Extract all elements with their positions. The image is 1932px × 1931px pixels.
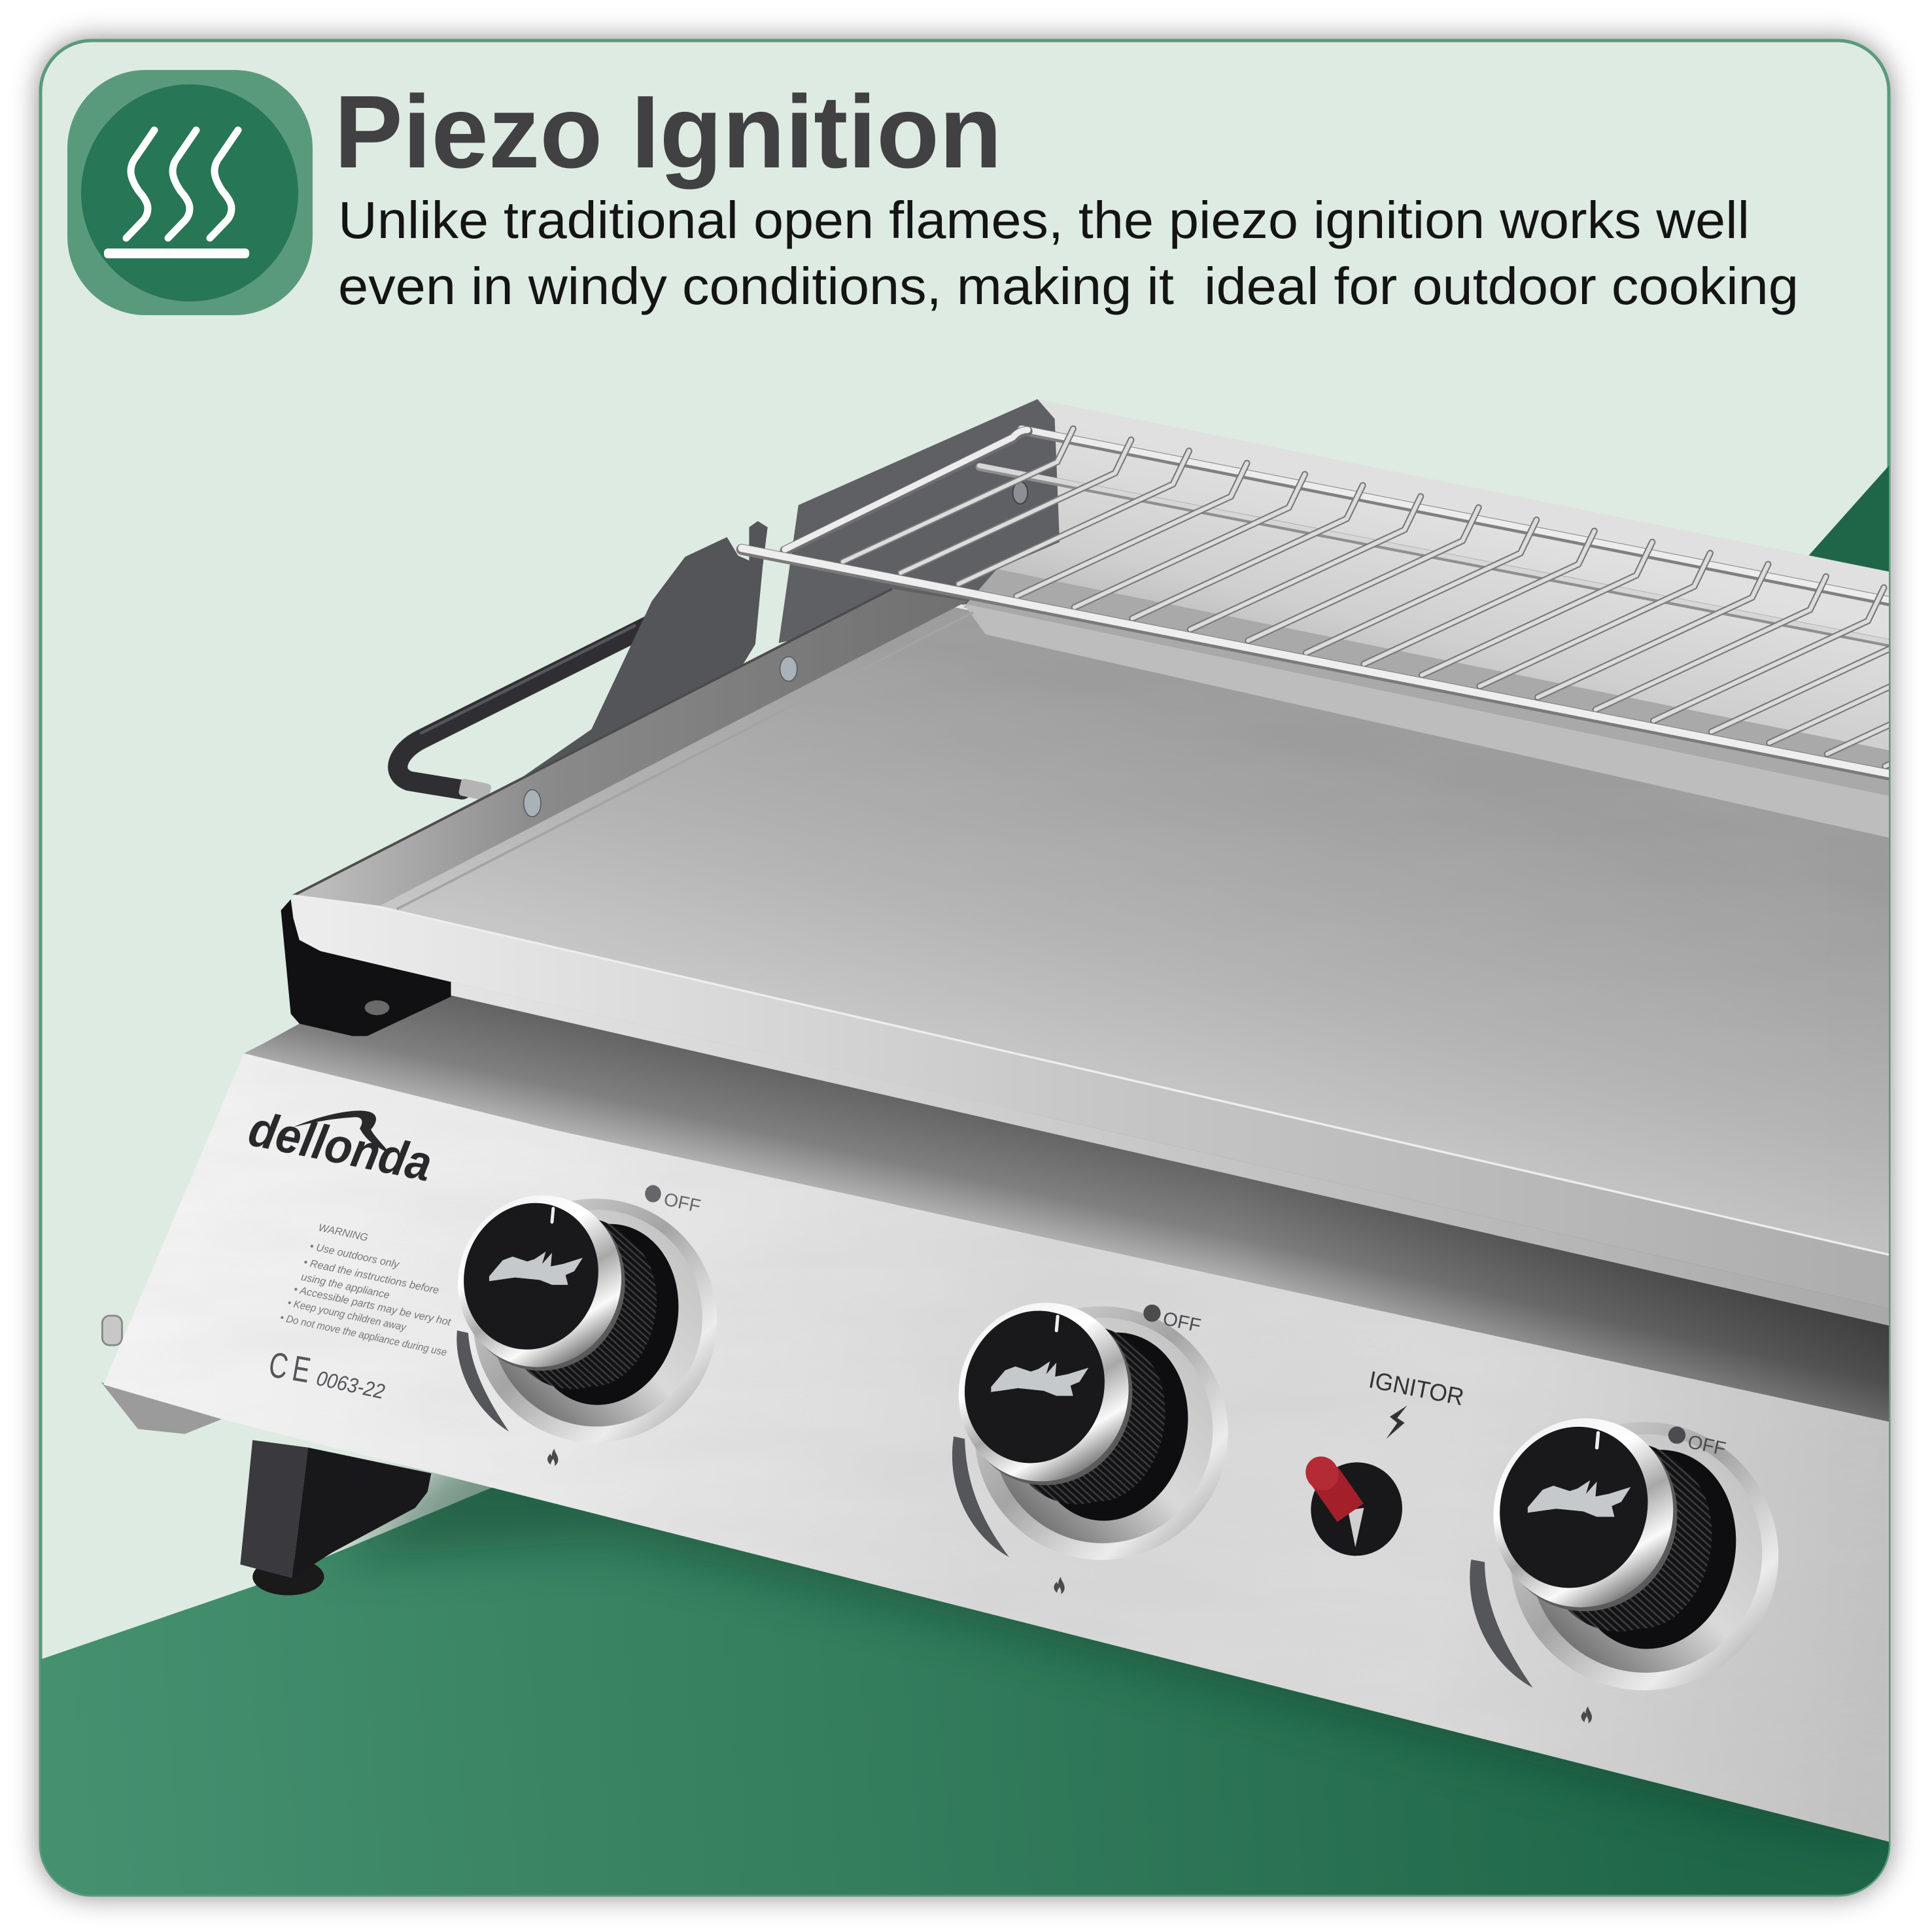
control knob 1 bbox=[438, 1176, 717, 1443]
rear side plate bbox=[779, 399, 1060, 643]
control knob 2 bbox=[938, 1282, 1228, 1560]
cast shadow on green bbox=[326, 1462, 1875, 1843]
griddle back wall bbox=[963, 604, 1889, 838]
certification mark: C bbox=[266, 1344, 291, 1387]
rack front rod bbox=[742, 548, 1889, 775]
certification mark bbox=[266, 1344, 387, 1403]
rack wires bbox=[843, 429, 1932, 766]
rack side frame bbox=[785, 430, 1027, 551]
off label 3: OFF bbox=[1686, 1431, 1727, 1460]
dial arc 1 bbox=[457, 1331, 509, 1431]
off label 1 bbox=[645, 1185, 702, 1216]
griddle surface bbox=[378, 607, 1889, 1255]
warning label: • Accessible parts may be very hot bbox=[293, 1284, 452, 1328]
wire rack bbox=[742, 429, 1932, 775]
light strip under griddle bbox=[451, 982, 1889, 1325]
off label 3 bbox=[1668, 1427, 1727, 1460]
ignitor button bbox=[1299, 1450, 1412, 1565]
description bbox=[338, 191, 1799, 315]
warning label: • Read the instructions before bbox=[303, 1257, 440, 1297]
left side fittings bbox=[101, 1316, 222, 1434]
ignitor label: IGNITOR bbox=[1367, 1366, 1466, 1410]
rack backing sheet bbox=[997, 399, 1889, 754]
flame mark 2 bbox=[1054, 1577, 1065, 1594]
dial arc 3 bbox=[1470, 1560, 1533, 1688]
off label 2: OFF bbox=[1161, 1308, 1203, 1337]
front bracket bbox=[281, 899, 451, 1036]
left rear bracket bbox=[524, 521, 768, 776]
griddle left rail bbox=[293, 589, 973, 909]
brand logo: dellonda bbox=[245, 1101, 436, 1191]
control knob 3 bbox=[1471, 1397, 1778, 1690]
warning label: WARNING bbox=[317, 1222, 369, 1244]
dial arc 2 bbox=[952, 1437, 1009, 1557]
griddle bolts bbox=[524, 482, 1027, 817]
description: even in windy conditions, making it ideal for outdoor cooking bbox=[338, 257, 1799, 315]
title: Piezo Ignition bbox=[334, 75, 1002, 190]
flame mark 1 bbox=[547, 1448, 558, 1466]
griddle front lip bbox=[293, 896, 1889, 1308]
description: Unlike traditional open flames, the piezo ignition works well bbox=[338, 191, 1750, 249]
certification mark: E bbox=[290, 1348, 313, 1390]
control panel face bbox=[103, 1053, 1889, 1841]
griddle rear band bbox=[963, 569, 1889, 803]
side handle bbox=[398, 623, 653, 802]
green background shape bbox=[41, 466, 1889, 1897]
off label 2 bbox=[1143, 1305, 1203, 1337]
warning label: • Do not move the appliance during use bbox=[279, 1312, 448, 1359]
warning label: • Use outdoors only bbox=[309, 1241, 401, 1271]
product scene bbox=[41, 399, 1932, 1897]
icon: heat surface bbox=[67, 70, 313, 315]
off label 1: OFF bbox=[662, 1188, 702, 1216]
flame mark 3 bbox=[1581, 1706, 1592, 1724]
warning label: using the appliance bbox=[300, 1272, 390, 1301]
certification mark: 0063-22 bbox=[315, 1366, 387, 1403]
icon: spark bbox=[1386, 1406, 1407, 1439]
grill foot bbox=[240, 1440, 431, 1596]
panel top band bbox=[244, 982, 1889, 1422]
warning label: • Keep young children away bbox=[286, 1297, 407, 1333]
rack rear rods bbox=[980, 429, 1889, 643]
warning label bbox=[279, 1222, 452, 1359]
